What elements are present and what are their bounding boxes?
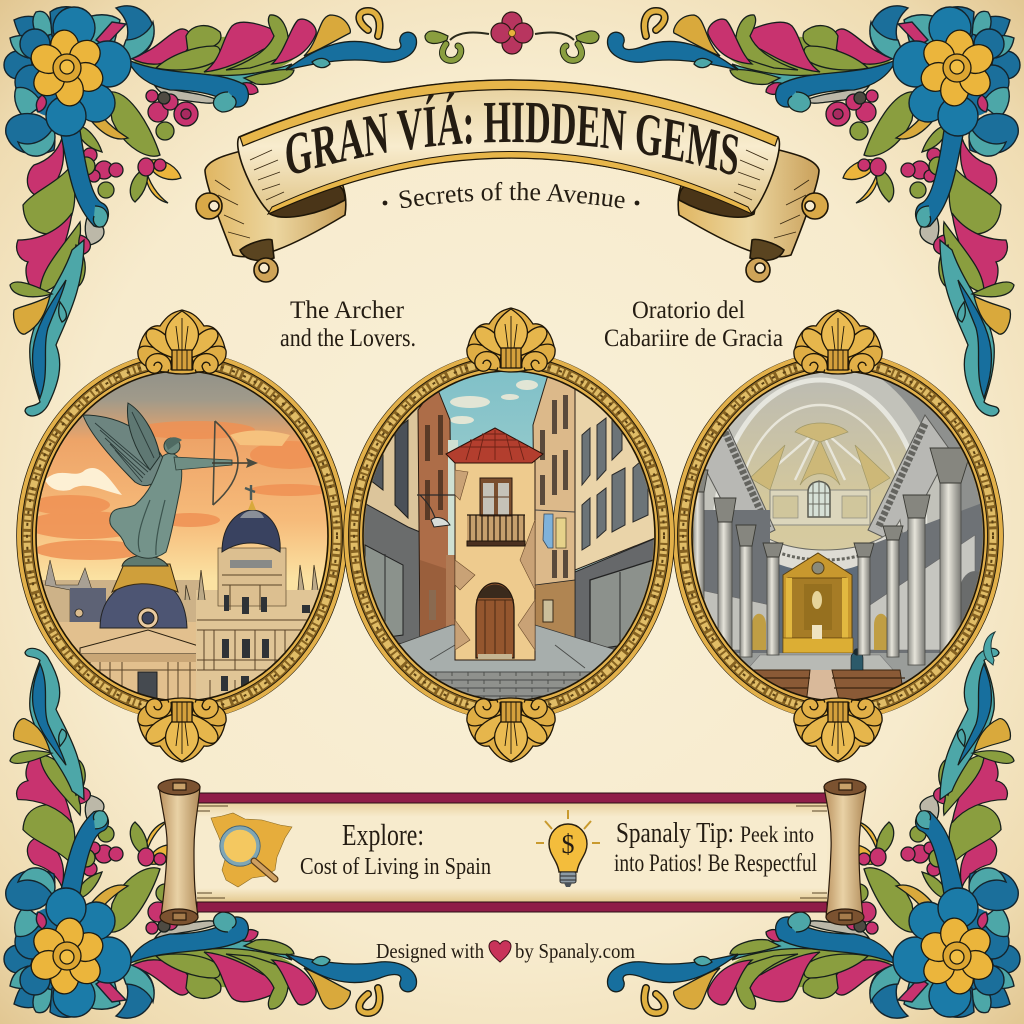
columns: [693, 480, 961, 668]
corner ornament: top right: [607, 6, 1020, 416]
text: Spanaly Tip: Spanaly Tip:: [616, 817, 734, 849]
main dome: [100, 578, 187, 628]
top centre floral ornament: [425, 12, 599, 60]
icon: Spain map with magnifier: [211, 813, 292, 887]
buildings left: [42, 580, 200, 622]
lamp and laundry: [417, 495, 455, 520]
label: Oratorio del Cabariire de Gracia: Oratorio del: [632, 297, 745, 324]
corner ornament: top left: [4, 6, 417, 416]
label: Oratorio del Cabariire de Gracia: [604, 297, 783, 352]
small teal leaf: [984, 632, 995, 665]
subtitle: [382, 182, 640, 208]
footer credit: by Spanaly.com: [515, 939, 635, 963]
text: Spanaly Tip: Peek into: [740, 822, 814, 847]
text: Explore: [300, 817, 491, 880]
house: [455, 460, 535, 660]
text: Explore: Explore:: [342, 817, 424, 852]
icon: light bulb with dollar sign: [536, 810, 600, 887]
title: GRAN VÍÁ: HIDDEN GEMS: [286, 92, 738, 174]
ground: [400, 624, 614, 672]
subtitle: Secrets of the Avenue: [399, 182, 625, 208]
icon: light bulb with dollar sign: $: [562, 829, 574, 859]
text: Spanaly Tip: into Patios! Be Respectful: [614, 850, 817, 877]
medallion: hidden house alley: [344, 308, 675, 762]
scroll roll left: [158, 779, 200, 925]
steps and floor: [736, 653, 940, 683]
footer credit: [376, 939, 635, 963]
medallion: archer statue scene: [17, 310, 347, 762]
medallion: Oratorio church interior: [673, 310, 1003, 762]
pediment facade: [80, 630, 205, 654]
corner ornament: bottom left: [4, 648, 417, 1018]
altar: [783, 553, 852, 653]
right buildings: [532, 377, 576, 584]
corner ornament: bottom right: [607, 648, 1020, 1018]
statue: [83, 415, 165, 486]
label: The Archer and the Lovers: and the Lovers.: [280, 325, 416, 352]
scroll roll right: [824, 779, 866, 925]
footer credit: Designed with: [376, 939, 484, 963]
title banner: [196, 80, 828, 282]
text: Explore: Cost of Living in Spain: [300, 854, 491, 880]
side walls and galleries: [704, 510, 770, 653]
bottom scroll panel: [158, 779, 866, 925]
label: The Archer and the Lovers: The Archer: [290, 297, 405, 324]
right palace: [196, 590, 319, 698]
left buildings: [366, 406, 420, 531]
label: Oratorio del Cabariire de Gracia: Cabariire de Gracia: [604, 325, 783, 352]
label: The Archer and the Lovers: [280, 297, 416, 352]
text: Spanaly Tip: [614, 817, 817, 877]
